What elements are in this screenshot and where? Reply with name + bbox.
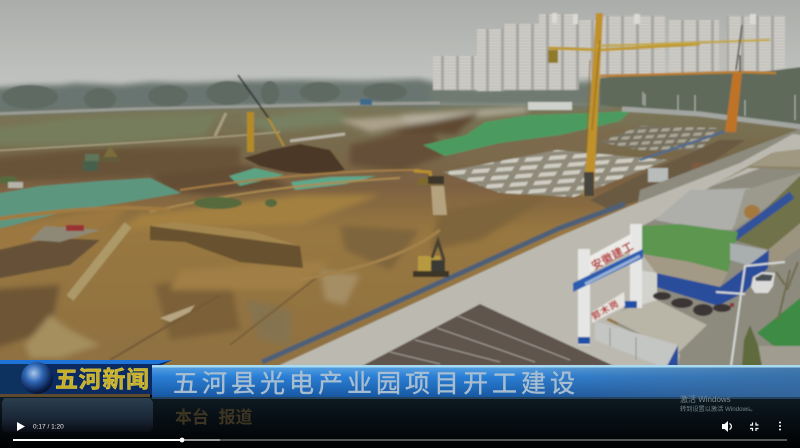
guard hut: [638, 270, 657, 306]
gate blue beam: [573, 249, 643, 292]
gate sign company name: 安徽建工: [589, 239, 636, 273]
main yellow tower crane: [548, 13, 770, 196]
logo bar: [0, 360, 172, 397]
ruts and dirt roads in sand: [0, 170, 440, 360]
orange tower crane: [600, 25, 776, 132]
small concrete wall: [730, 243, 767, 270]
access ramp: [431, 186, 447, 215]
pile of dark soil: [244, 144, 345, 175]
blurred ground tone masses: [0, 107, 640, 358]
blue fence right: [733, 195, 792, 238]
icon: globe: [21, 362, 53, 394]
construction materials pile: [590, 128, 745, 210]
boundary wall: [0, 103, 440, 114]
green dust net, large slope: [423, 111, 630, 156]
news programme name: 五河新闻: [55, 366, 149, 392]
tree line right, in front of towers: [600, 66, 800, 126]
roadside tree foreground: [742, 325, 762, 366]
green patch far right: [757, 290, 800, 347]
dark paved plaza: [362, 304, 614, 366]
tree clumps: [2, 81, 407, 110]
main earth ground: [0, 105, 800, 370]
sidewalk strip: [768, 215, 800, 268]
green lawn near gate: [642, 224, 738, 272]
foundation slab grid, near: [443, 150, 668, 197]
green dust net covering mound, left: [0, 178, 181, 230]
blue courtyard wall: [656, 250, 769, 306]
Windows activation watermark: 转到设置以激活 Windows。: [680, 405, 756, 413]
excavator upper: [414, 171, 444, 185]
blue site fence along road: [262, 204, 625, 362]
icon: exit fullscreen: [750, 422, 758, 431]
white yard fence: [595, 321, 678, 366]
left dark panel: [2, 398, 153, 432]
time display: 0:17 / 1:20: [33, 424, 64, 430]
far field grass patches: [0, 112, 220, 146]
rock rubble lower right: [755, 346, 800, 370]
entrance gate: [573, 224, 643, 345]
foundation slab grid, far: [600, 126, 720, 150]
roadside trees behind blue fence: [733, 176, 800, 250]
small far tower crane: [238, 75, 284, 152]
parked white car: [751, 272, 775, 293]
orange sand highlights: [120, 195, 380, 230]
far tracks: [0, 113, 345, 151]
vegetation patches: [0, 176, 277, 209]
news lower-third broadcast overlay: [0, 360, 800, 448]
parked motorbikes: [653, 292, 734, 316]
street lamp: [716, 262, 785, 366]
excavated trench: [0, 222, 303, 322]
residential high-rise towers: [433, 13, 785, 91]
yard concrete: [607, 298, 707, 353]
icon: volume: [722, 421, 731, 432]
green trucks and excavator, far left: [83, 146, 120, 171]
green dust net, small mound: [229, 168, 284, 186]
distant tree line: [0, 79, 610, 114]
video player controls: [13, 421, 787, 442]
icon: play: [17, 422, 25, 431]
dark excavated bands: [0, 146, 240, 182]
hazy sky: [0, 0, 800, 115]
gravel road and right-hand base: [610, 125, 800, 370]
street lamps in the distance: [643, 92, 795, 120]
gate upper sign: [590, 234, 631, 273]
reporter credit: 本台 报道: [175, 407, 252, 427]
gate left pillar: [578, 249, 590, 345]
icon: more menu: [779, 422, 781, 430]
headline text: 五河县光电产业园项目开工建设: [173, 370, 575, 398]
far pale strips: [340, 110, 490, 132]
dark panels beside road: [655, 148, 800, 230]
walkway strip by lawn: [642, 254, 728, 287]
excavator near road: [413, 241, 449, 277]
progress bar: [13, 438, 787, 442]
concrete road: [278, 134, 800, 366]
gate right pillar: [630, 224, 642, 308]
entrance gate: 郭木岗: [590, 297, 621, 322]
Windows activation watermark: [680, 394, 756, 413]
darker soil patches: [0, 285, 60, 350]
small site sheds and vehicle: [8, 99, 572, 231]
gate lower sign: [592, 292, 625, 323]
green dust net, strip: [291, 176, 376, 190]
bare trees: [776, 262, 798, 320]
headline banner: [152, 365, 800, 399]
Windows activation watermark: 激活 Windows: [680, 394, 731, 404]
dark lower area: [0, 397, 800, 448]
elevated fence, far right: [622, 109, 800, 128]
